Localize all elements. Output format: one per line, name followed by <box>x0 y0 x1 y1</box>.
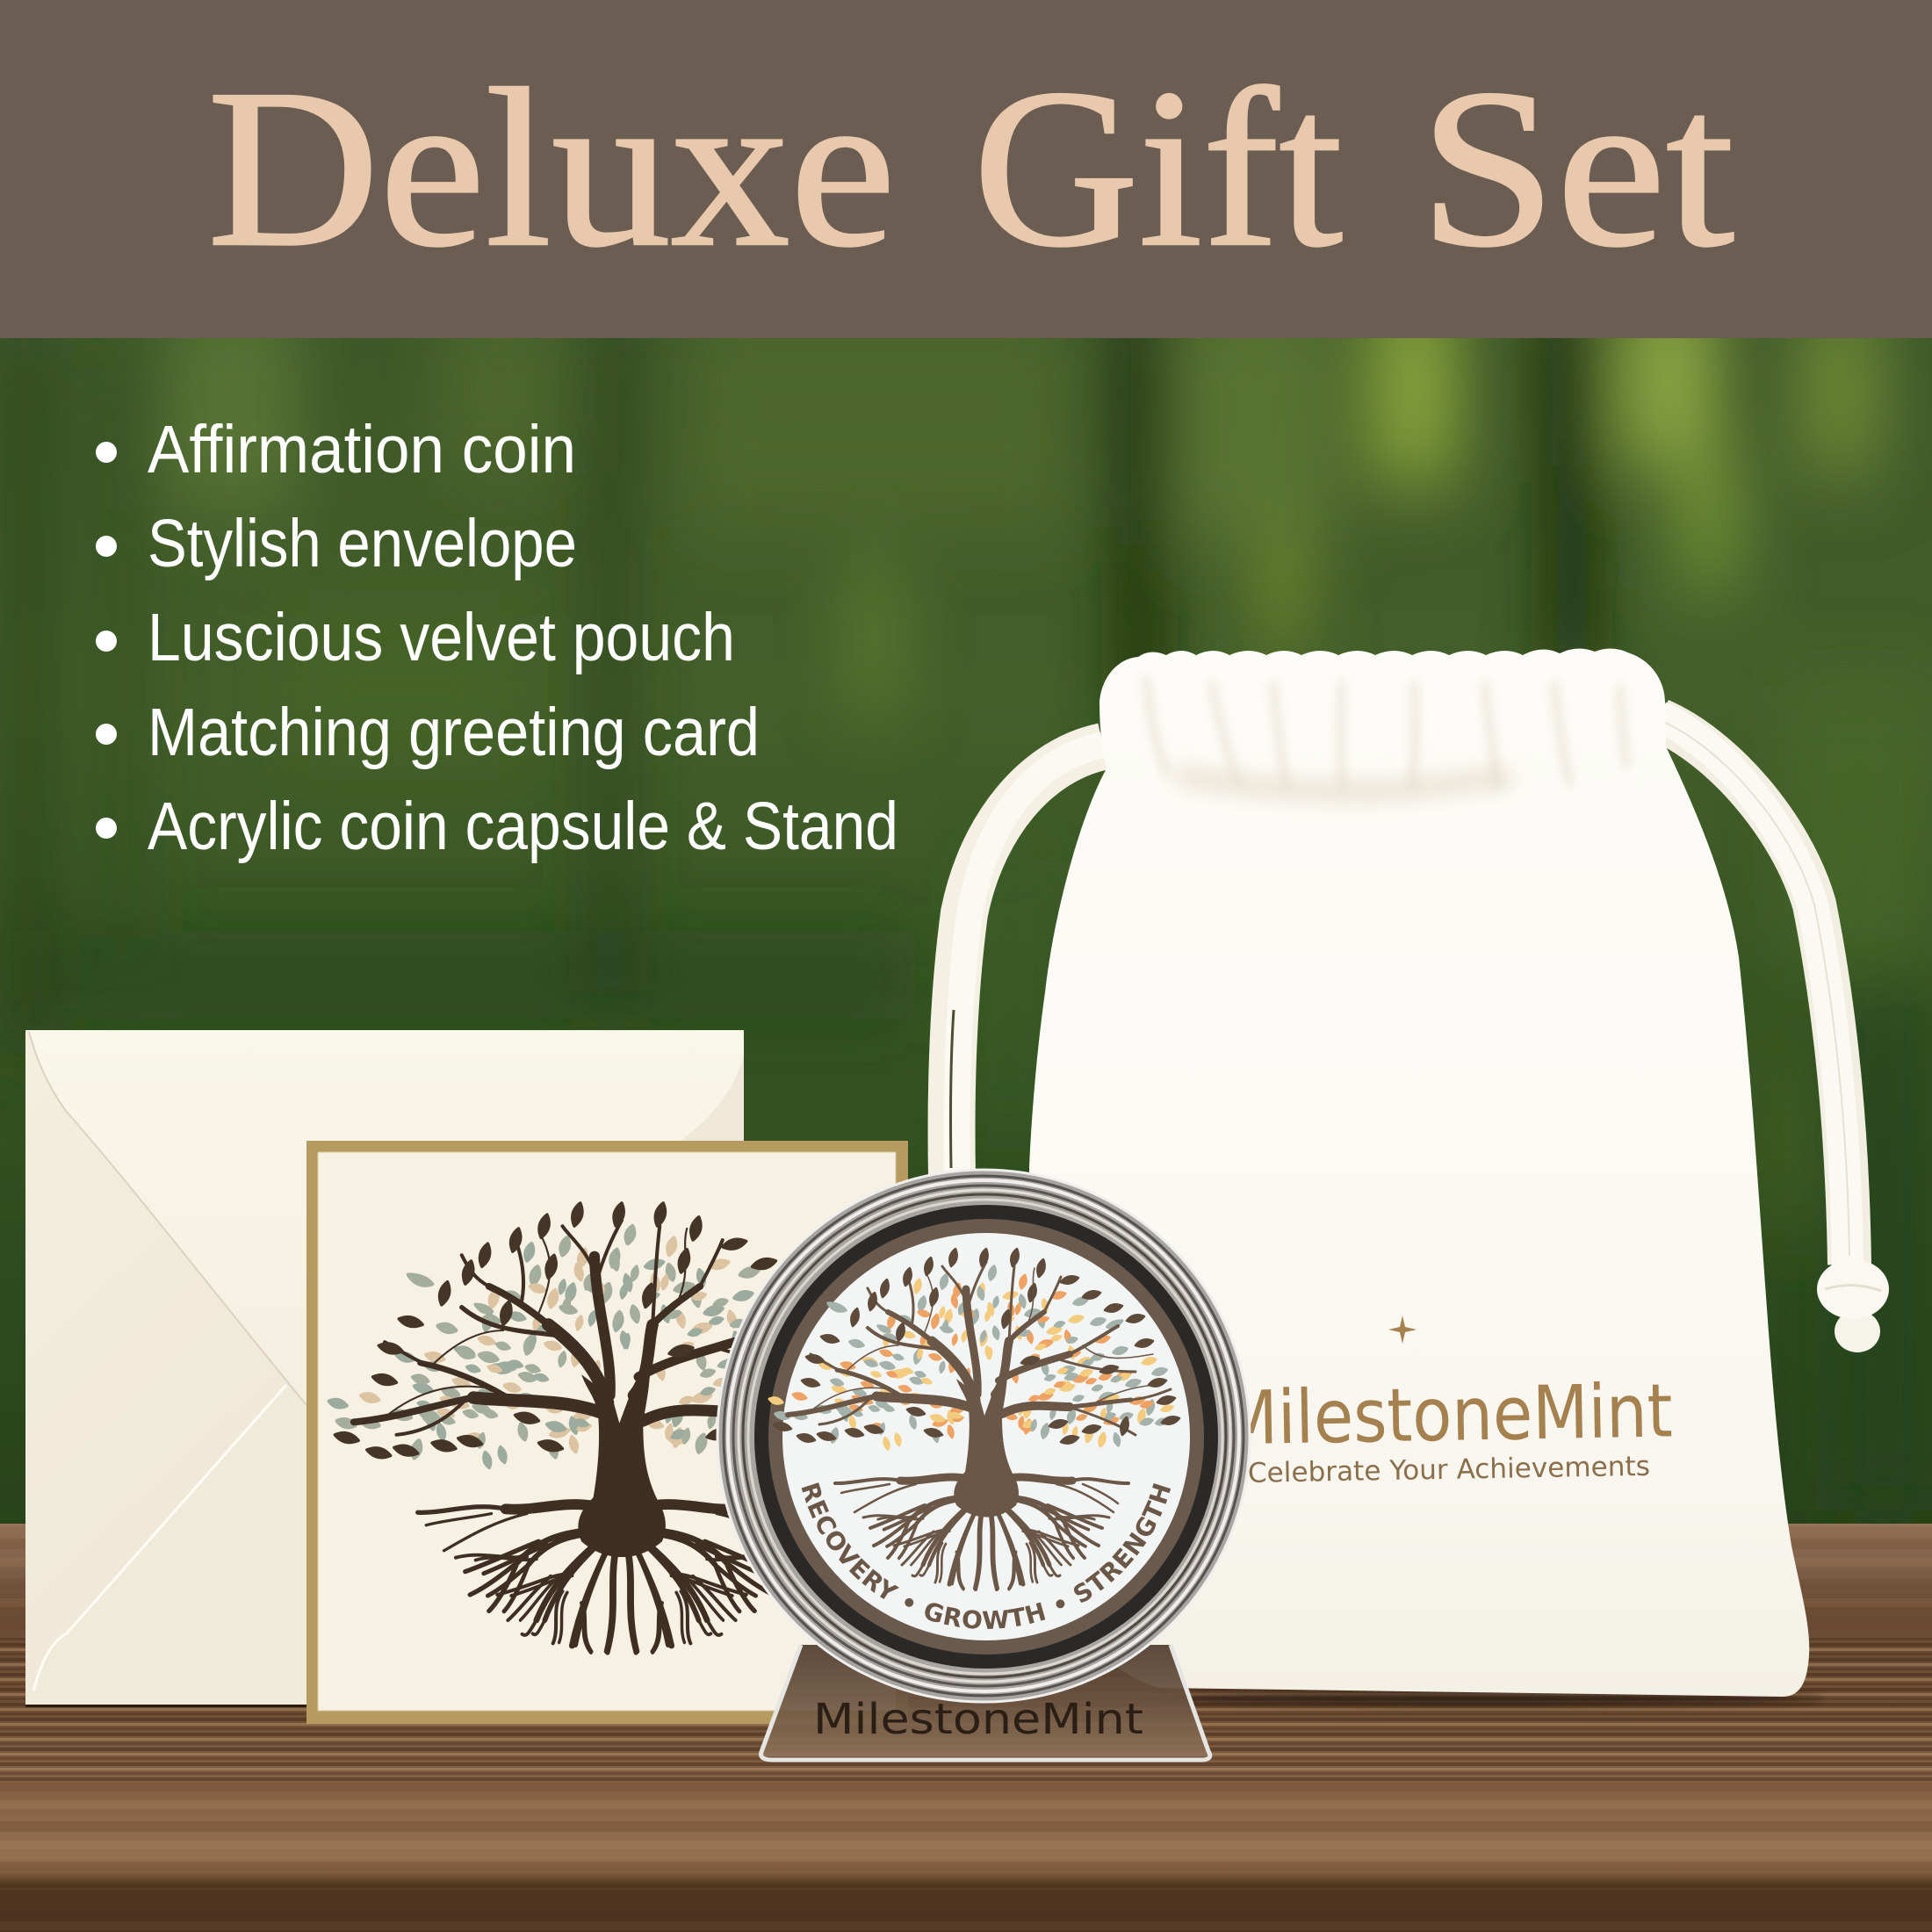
coin face <box>782 1233 1190 1640</box>
coin tree illustration <box>769 1249 1179 1590</box>
greeting card <box>306 1141 908 1724</box>
envelope <box>25 1030 744 1707</box>
header band <box>0 0 1932 338</box>
stand logo text: MilestoneMint <box>813 1695 1143 1744</box>
title: Gift <box>973 42 1344 293</box>
title: Set <box>1419 42 1735 293</box>
velvet pouch <box>1029 648 1809 1697</box>
icon: star <box>1388 1316 1417 1344</box>
pouch logo: MilestoneMint <box>1222 1367 1673 1461</box>
forest background <box>0 290 1932 1532</box>
card tree illustration <box>329 1203 883 1653</box>
left drawstring <box>950 745 1103 1177</box>
wooden table <box>0 1524 1932 1932</box>
right drawstring and knot <box>1660 717 1889 1352</box>
pouch logo: Celebrate Your Achievements <box>1248 1451 1650 1489</box>
item: velvet pouch: Luscious velvet pouch <box>148 600 735 675</box>
title <box>207 42 1735 293</box>
contents list <box>96 412 898 864</box>
title: Deluxe <box>207 42 896 293</box>
item: affirmation coin: Affirmation coin <box>148 412 576 487</box>
acrylic stand <box>761 1645 1210 1760</box>
coin curved text: RECOVERY • GROWTH • STRENGTH <box>801 1482 1171 1629</box>
coin capsule <box>717 1170 1250 1702</box>
item: stylish envelope: Stylish envelope <box>148 506 577 581</box>
pouch logo <box>1222 1316 1673 1489</box>
item: greeting card: Matching greeting card <box>148 695 760 770</box>
item: capsule and stand: Acrylic coin capsule & Stand <box>148 789 898 864</box>
pouch shadow <box>1146 1691 1822 1705</box>
